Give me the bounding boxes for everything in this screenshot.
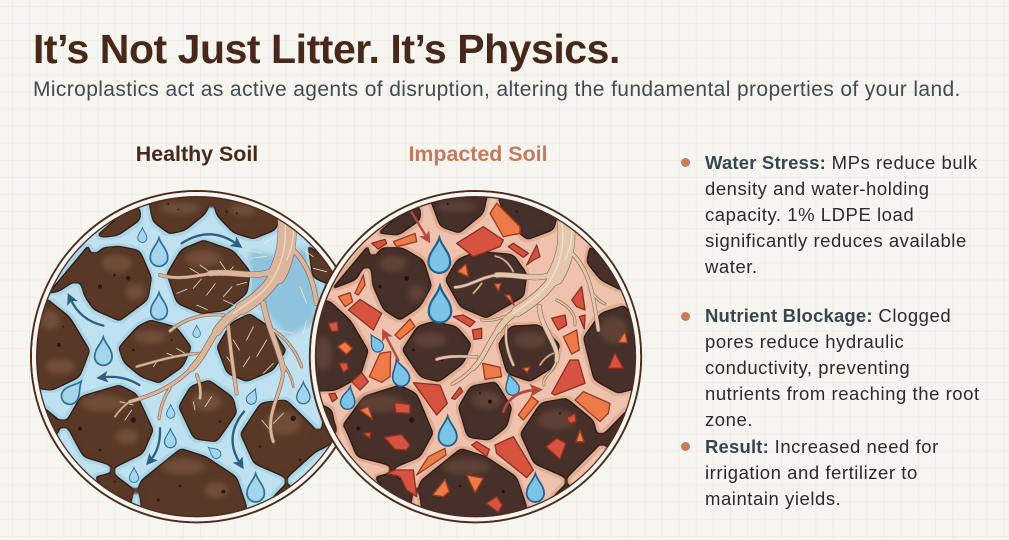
title: It’s Not Just Litter. It’s Physics. bbox=[33, 26, 620, 72]
text block: result: irrigation and fertilizer to bbox=[705, 462, 918, 483]
bullet marker: water stress bbox=[681, 158, 690, 167]
bullet marker: result bbox=[681, 442, 690, 451]
disrupted flow arrows bbox=[385, 212, 535, 412]
roots bbox=[115, 213, 317, 442]
compacted soil aggregates bbox=[310, 190, 643, 527]
text block: water stress: water. bbox=[705, 256, 758, 277]
bullet marker: nutrient blockage bbox=[681, 312, 690, 321]
diagram: soil comparison circles bbox=[30, 190, 642, 524]
text block: result bbox=[705, 436, 939, 509]
soil highlights bbox=[40, 202, 302, 498]
panel: impacted soil circle bbox=[310, 190, 643, 527]
subtitle: Microplastics act as active agents of disruption, altering the fundamental properties of your land. bbox=[33, 78, 961, 101]
text block: water stress: Water Stress: MPs reduce bulk bbox=[705, 152, 978, 173]
water shading near roots bbox=[247, 247, 320, 337]
text block: nutrient blockage: Nutrient Blockage: Clogged bbox=[705, 305, 951, 326]
panel: healthy soil circle bbox=[30, 190, 362, 527]
circle border bbox=[310, 191, 641, 522]
text block: nutrient blockage: zone. bbox=[705, 409, 753, 430]
water flow arrows bbox=[71, 234, 244, 463]
orange microplastic fragments bbox=[338, 203, 627, 497]
roots bbox=[437, 213, 605, 385]
circle border bbox=[31, 191, 362, 522]
text block: nutrient blockage: conductivity, preventing bbox=[705, 357, 910, 378]
heading: impacted soil: Impacted Soil bbox=[408, 142, 548, 166]
text block: water stress: density and water-holding bbox=[705, 178, 930, 199]
text block: result: Result: Increased need for bbox=[705, 436, 939, 457]
text block: result: maintain yields. bbox=[705, 488, 841, 509]
text block: water stress bbox=[705, 152, 978, 277]
water droplets bbox=[339, 238, 544, 502]
soil pores bbox=[356, 203, 561, 493]
root fibres bbox=[513, 220, 572, 313]
soil pores bbox=[57, 203, 301, 502]
water droplets bbox=[58, 228, 310, 502]
text block: nutrient blockage bbox=[705, 305, 980, 430]
text block: water stress: significantly reduces available bbox=[705, 230, 967, 251]
root hairs bbox=[120, 237, 327, 430]
soil aggregates bbox=[37, 197, 332, 516]
soil highlights bbox=[315, 202, 627, 474]
text block: nutrient blockage: pores reduce hydraulic bbox=[705, 331, 904, 352]
text block: water stress: capacity. 1% LDPE load bbox=[705, 204, 914, 225]
heading: healthy soil: Healthy Soil bbox=[136, 142, 258, 166]
red microplastic fragments bbox=[328, 227, 623, 512]
text block: nutrient blockage: nutrients from reaching the root bbox=[705, 383, 980, 404]
root fibres bbox=[233, 220, 293, 313]
